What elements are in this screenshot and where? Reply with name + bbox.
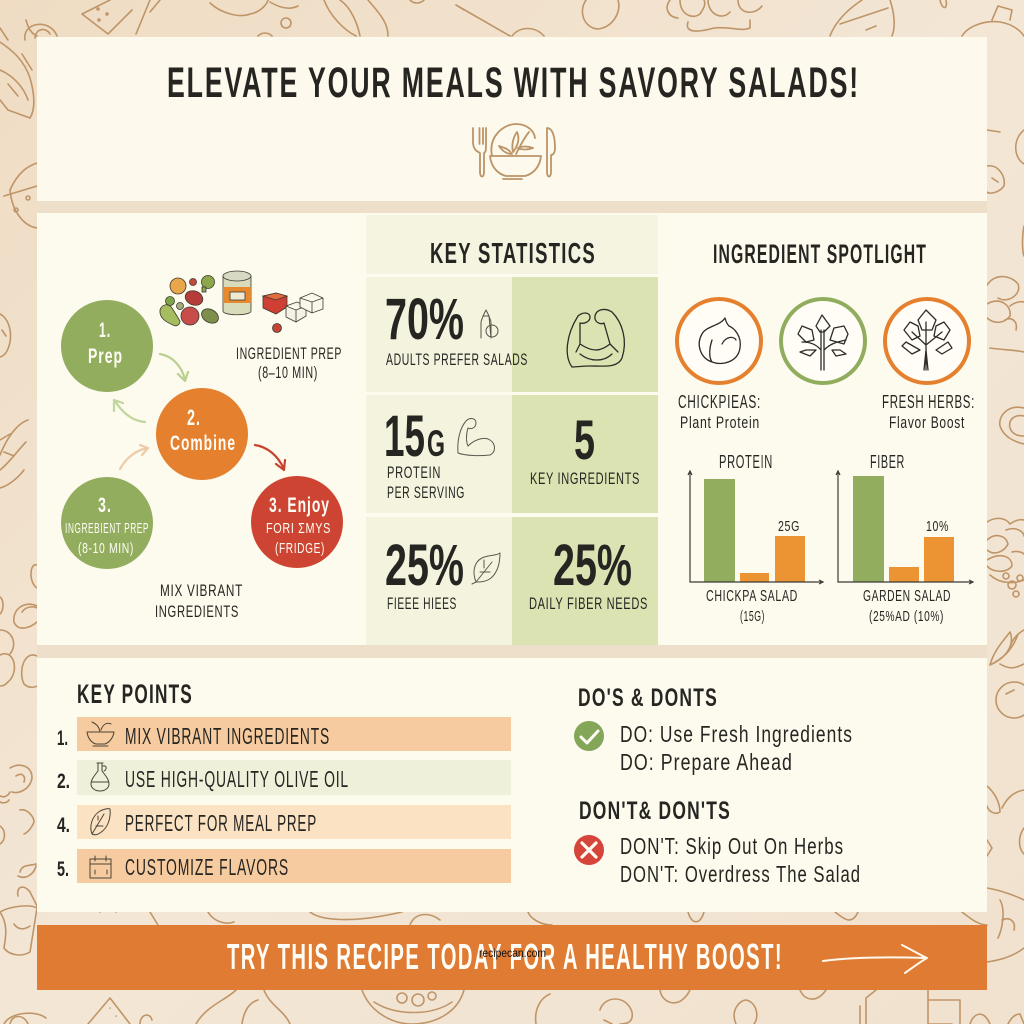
step 2 combine: 2. — [187, 405, 201, 430]
point 4: 4. — [57, 814, 70, 837]
step 3 ingredient prep: (8-10 MIN) — [78, 540, 134, 557]
arrow: combine to prep — [114, 400, 145, 422]
heading: dos: DO'S & DONTS — [578, 684, 718, 712]
step 2 combine — [156, 388, 248, 480]
icon: bicep — [458, 419, 494, 456]
point 4: PERFECT FOR MEAL PREP — [125, 810, 317, 836]
step 1 prep — [61, 300, 153, 392]
heading: key statistics: KEY STATISTICS — [430, 238, 596, 270]
label: fresh herbs: FRESH HERBS: — [882, 392, 975, 412]
label: fresh herbs: Flavor Boost — [889, 413, 965, 432]
heading: donts: DON'T& DON'TS — [579, 797, 731, 825]
panel: cycle process — [61, 271, 343, 621]
point 2: 2. — [57, 770, 70, 793]
point 5: 5. — [57, 858, 69, 881]
step 3 ingredient prep: INGREBIENT PREP — [65, 520, 149, 537]
step 3 enjoy: 3. Enjoy — [269, 494, 330, 517]
step 3 enjoy — [251, 476, 343, 568]
bar chart: protein: CHICKPA SALAD — [706, 588, 798, 605]
bottom panel — [37, 658, 987, 912]
callout: ingredient prep: (8–10 MIN) — [258, 363, 318, 382]
icon: leaf — [472, 553, 500, 584]
point 5: CUSTOMIZE FLAVORS — [125, 854, 289, 880]
label: chickpeas: CHICKPIEAS: — [678, 392, 761, 412]
label: chickpeas — [678, 392, 761, 432]
dont list: DON'T: Skip Out On Herbs — [620, 833, 844, 859]
stat: 5 key ingredients: 5 — [574, 408, 595, 471]
arrow: prep to combine — [160, 354, 188, 381]
point 2 — [57, 760, 511, 795]
point 2: USE HIGH-QUALITY OLIVE OIL — [125, 766, 349, 792]
icon: cross mark — [574, 835, 604, 865]
step 3 ingredient prep: 3. — [98, 494, 112, 517]
stat: 15g protein: PROTEIN — [387, 463, 441, 482]
icon: check mark — [574, 721, 604, 751]
panel: ingredient spotlight — [677, 239, 975, 625]
bar chart: fiber — [836, 452, 973, 625]
stat: 15g protein: PER SERVING — [387, 483, 465, 502]
panel: dos and donts — [574, 684, 861, 887]
stat: 15g protein: G — [427, 423, 445, 464]
icon: fork, salad bowl and knife — [473, 124, 555, 179]
step 3 enjoy: FORI ΣMYS — [266, 520, 331, 537]
header panel — [37, 37, 987, 201]
icon: parsley herb — [781, 299, 865, 383]
watermark: recipecan.com — [479, 946, 546, 960]
arrow: step 3 to combine — [120, 445, 148, 469]
stat: 25 percent fibre: FIEEE HIEES — [387, 594, 457, 613]
icon: leaf — [91, 809, 110, 835]
arrow: combine to enjoy — [255, 445, 285, 470]
bar chart: fiber: FIBER — [870, 452, 905, 472]
step 3 enjoy: (FRIDGE) — [275, 540, 325, 557]
stat: 5 key ingredients: KEY INGREDIENTS — [530, 469, 640, 488]
bar chart: fiber: 10% — [926, 518, 949, 535]
stat: 5 key ingredients — [530, 408, 640, 488]
arrow: cta — [823, 945, 927, 973]
icon: ingredient illustrations — [160, 271, 323, 332]
stat: 25 percent daily fiber — [529, 533, 648, 613]
heading: key points: KEY POINTS — [77, 679, 193, 709]
bar chart: fiber: (25%AD (10%) — [869, 608, 944, 625]
point 5 — [57, 849, 511, 883]
caption: mix vibrant ingredients — [155, 581, 243, 621]
point 4 — [57, 805, 511, 839]
dont list: DON'T: Overdress The Salad — [620, 861, 861, 887]
stat: 15g protein — [366, 395, 658, 513]
do list: DO: Prepare Ahead — [620, 749, 793, 775]
icon: salad bowl — [87, 722, 114, 746]
stat: 25 percent fibre — [366, 517, 658, 645]
bar chart: protein — [688, 452, 823, 625]
icon: flexed arms — [567, 309, 624, 367]
stat: 25 percent daily fiber: 25% — [553, 533, 632, 598]
point 1: 1. — [57, 727, 68, 750]
step 2 combine: Combine — [170, 432, 236, 455]
icon: bottle and fruit — [481, 310, 498, 338]
icon: chickpea — [677, 299, 761, 383]
do list: DO: Use Fresh Ingredients — [620, 721, 853, 747]
step 3 ingredient prep — [61, 477, 153, 569]
divider band lower — [37, 645, 987, 658]
stat: 15g protein: 15 — [384, 404, 425, 469]
bar chart: fiber: GARDEN SALAD — [863, 588, 951, 605]
stat: 70 percent adults — [366, 277, 658, 392]
do list — [620, 721, 853, 775]
caption: mix vibrant ingredients: INGREDIENTS — [155, 602, 239, 621]
stat: 70 percent adults: ADULTS PREFER SALADS — [386, 350, 528, 369]
step 1 prep: Prep — [88, 345, 123, 368]
label: fresh herbs — [882, 392, 975, 432]
stat: 25 percent fibre: 25% — [385, 533, 464, 598]
label: chickpeas: Plant Protein — [680, 413, 760, 432]
bar chart: protein: 25G — [778, 518, 800, 535]
callout: ingredient prep — [236, 344, 342, 382]
main panel — [37, 213, 987, 645]
step 1 prep: 1. — [99, 319, 111, 342]
call to action banner — [37, 925, 987, 990]
panel: key points — [57, 679, 511, 883]
bar chart: protein: PROTEIN — [719, 452, 773, 472]
bar chart: protein: (15G) — [740, 608, 765, 625]
divider band — [37, 201, 987, 213]
icon: olive oil bottle — [91, 763, 109, 791]
point 1: MIX VIBRANT INGREDIENTS — [125, 723, 330, 749]
caption: mix vibrant ingredients: MIX VIBRANT — [160, 581, 243, 600]
icon: calendar — [90, 856, 111, 878]
icon: fresh herb bunch — [885, 299, 969, 383]
dont list — [620, 833, 861, 887]
stat: 25 percent daily fiber: DAILY FIBER NEEDS — [529, 594, 648, 613]
callout: ingredient prep: INGREDIENT PREP — [236, 344, 342, 363]
stat: 70 percent adults: 70% — [385, 287, 464, 352]
panel: key statistics — [366, 215, 658, 645]
point 1 — [57, 717, 511, 751]
